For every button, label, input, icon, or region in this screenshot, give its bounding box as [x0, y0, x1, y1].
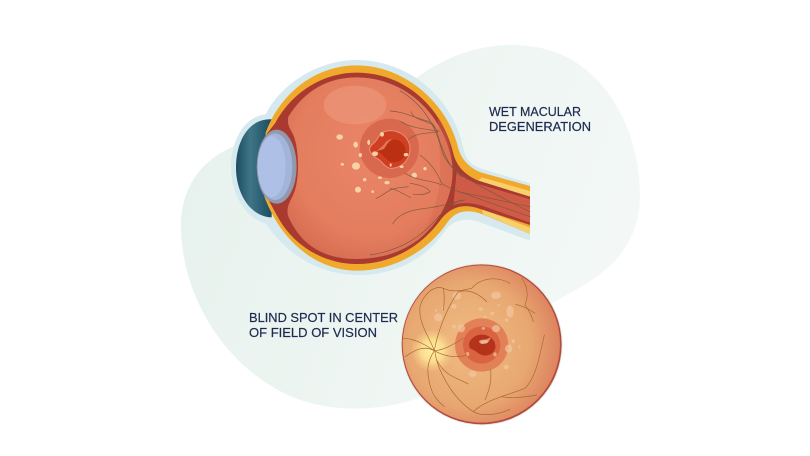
pale spots	[434, 292, 521, 377]
fundus disc	[401, 263, 563, 425]
label: blind spot: OF FIELD OF VISION	[249, 326, 377, 340]
nerve fibres	[453, 172, 530, 223]
label: wet macular degeneration: WET MACULAR	[489, 105, 581, 119]
sclera and optic nerve sheath	[264, 65, 530, 271]
fundus vessels	[403, 278, 544, 415]
label: wet macular degeneration	[489, 105, 591, 134]
retina interior	[287, 77, 453, 259]
choroid	[267, 73, 530, 264]
lens	[257, 130, 297, 204]
macular rings	[455, 318, 508, 372]
cornea	[236, 119, 272, 217]
light patch	[324, 86, 386, 124]
label: wet macular degeneration: DEGENERATION	[489, 120, 591, 134]
fundus view	[401, 263, 563, 425]
exudate spots	[336, 132, 427, 193]
label: blind spot: BLIND SPOT IN CENTER	[249, 311, 398, 325]
macular lesion	[360, 119, 419, 178]
eye cross-section	[231, 60, 530, 275]
shading on right of retina	[417, 117, 452, 242]
retinal vessels	[370, 91, 530, 255]
label: blind spot	[249, 311, 398, 340]
background blob	[181, 45, 640, 409]
eye outline glow	[231, 60, 530, 275]
sheath highlight	[478, 177, 530, 234]
optic disc glow	[412, 330, 453, 371]
